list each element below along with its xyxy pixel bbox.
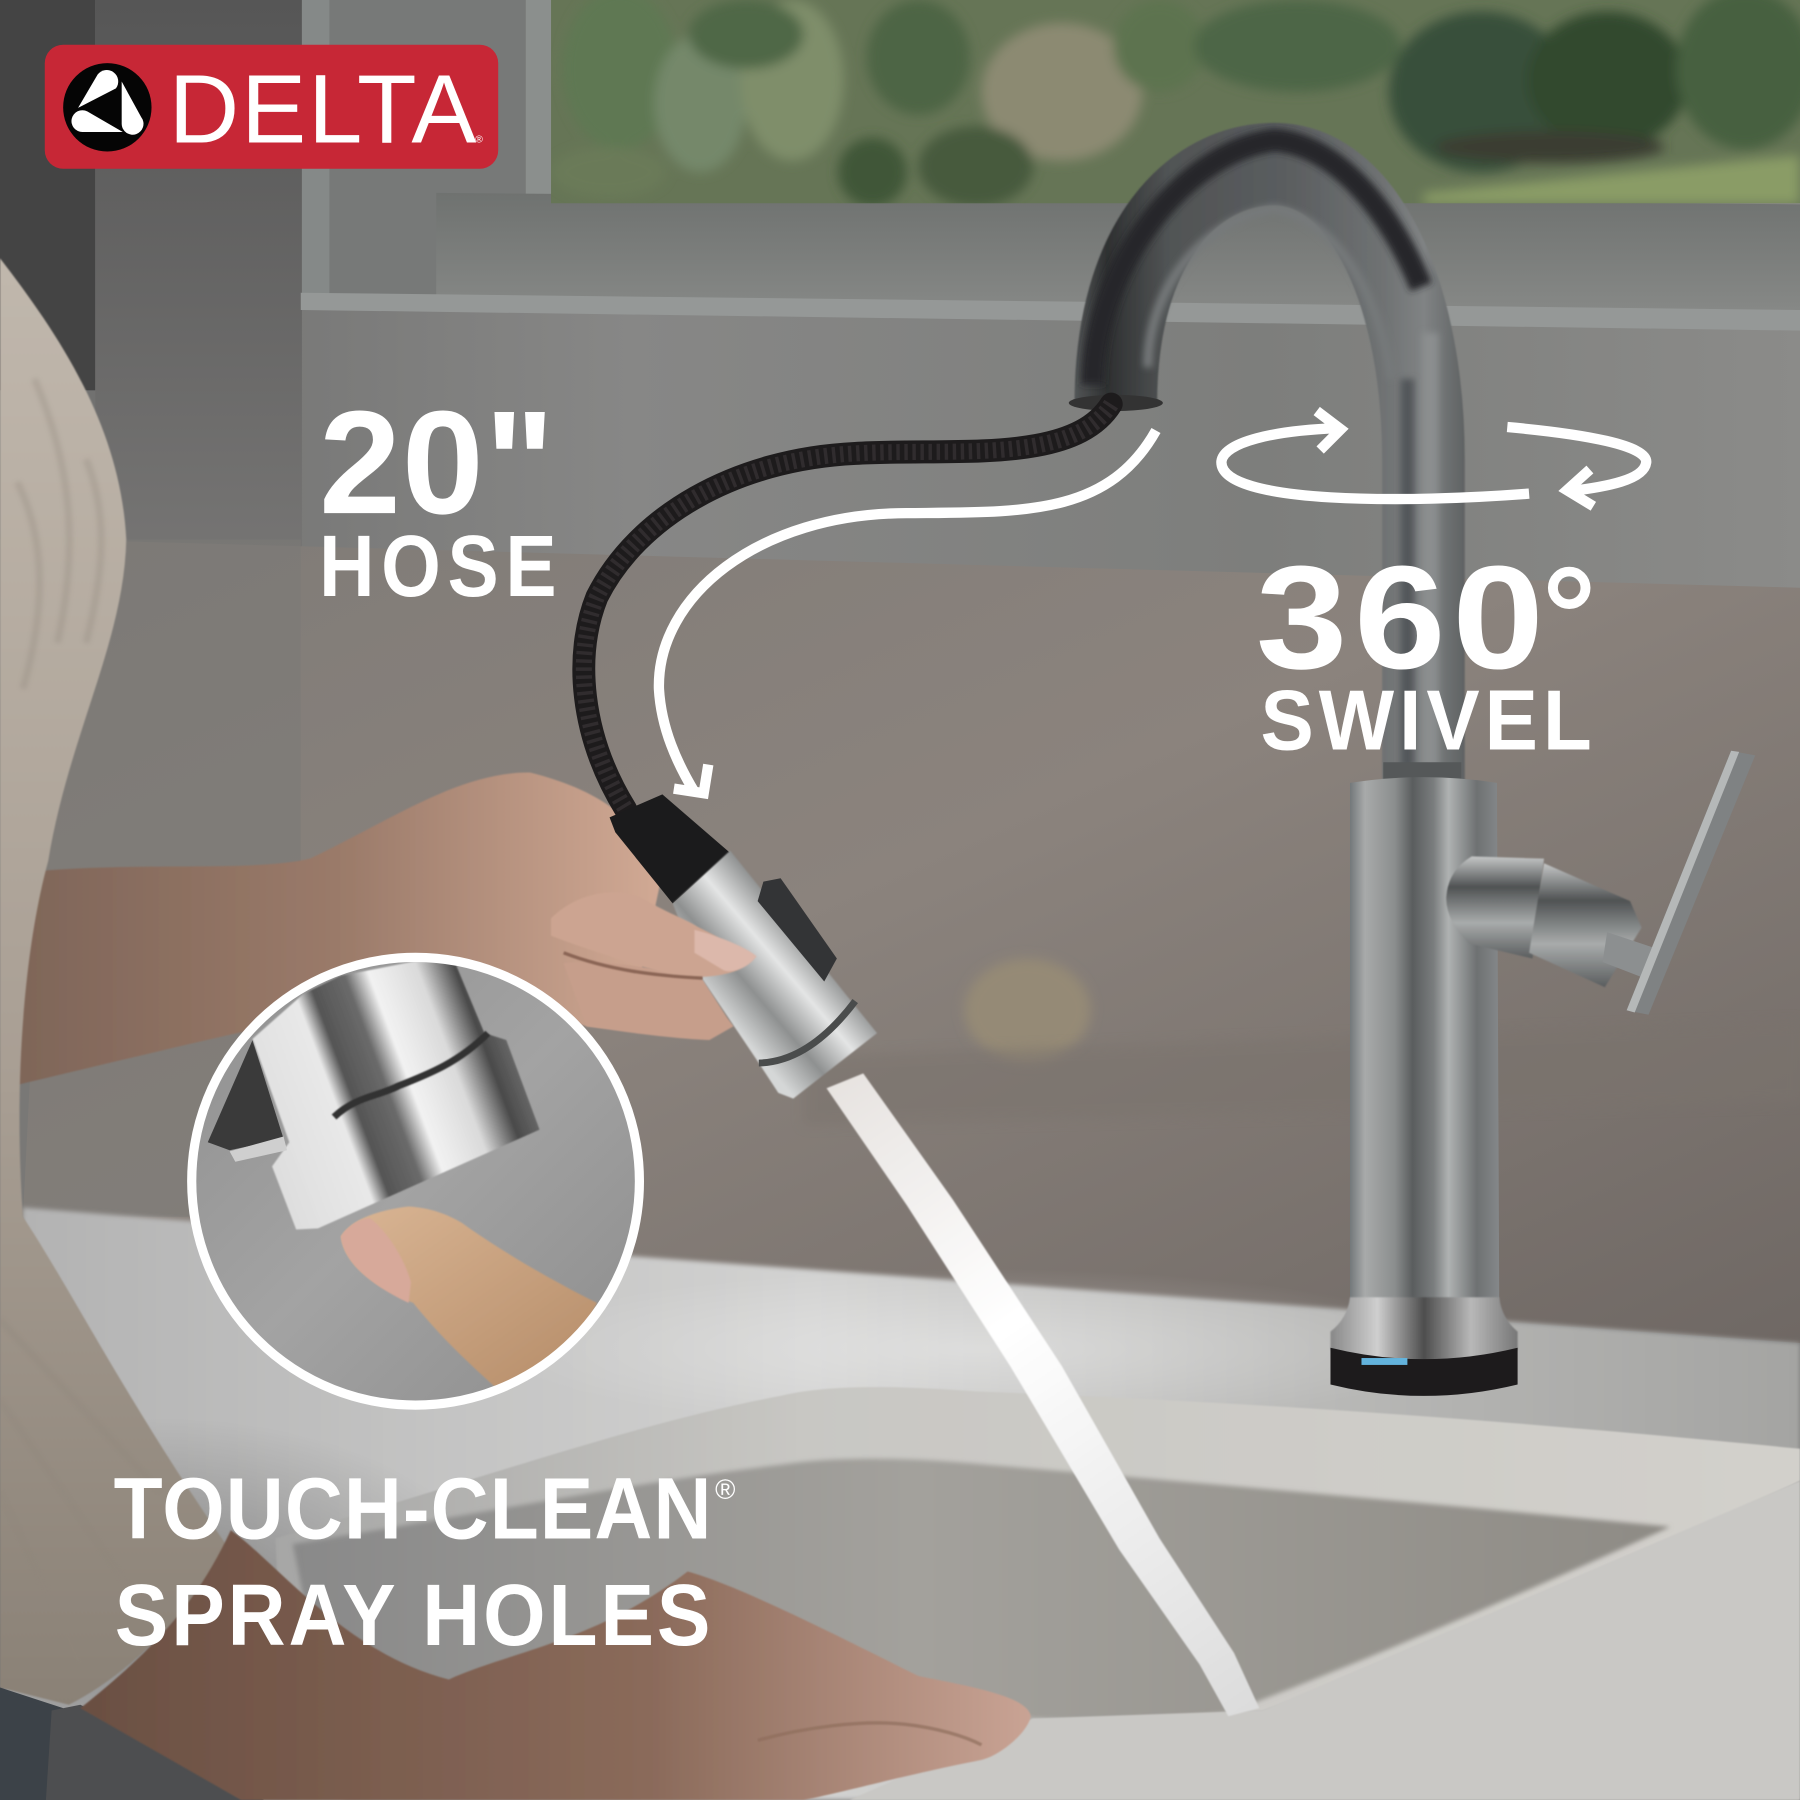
hose label (319, 381, 557, 615)
black collar (610, 794, 730, 903)
lower finger (564, 962, 734, 1040)
hose label: 20" (319, 381, 554, 545)
faucet body (1350, 777, 1499, 1303)
touch-clean label: ® (715, 1474, 735, 1505)
index finger over spray head (551, 892, 757, 978)
window sill (436, 193, 1800, 310)
sweater (0, 258, 230, 1705)
metal wand (673, 851, 877, 1099)
fingernail (695, 930, 757, 971)
sprayer button (758, 878, 837, 982)
upper arm and hand (17, 773, 660, 1085)
gooseneck spout (1069, 140, 1430, 781)
faucet (1069, 140, 1755, 1396)
swivel label: 360 (1256, 536, 1544, 700)
Delta logo badge: ® (475, 134, 483, 145)
touch-clean label: SPRAY HOLES (115, 1566, 710, 1664)
inset detail circle (192, 957, 639, 1405)
handle (1446, 751, 1755, 1015)
black sprayer button (208, 1040, 284, 1150)
sprayer metal (253, 959, 540, 1229)
swivel label: ° (1541, 539, 1598, 699)
window view with trees (551, 0, 1800, 207)
clip band (759, 1001, 855, 1063)
countertop (0, 1208, 1800, 1800)
lower hand (80, 1530, 1031, 1800)
swivel label (1256, 536, 1598, 768)
touch-clean label (114, 1459, 735, 1664)
jeans (0, 1688, 63, 1800)
Delta logo badge (45, 45, 498, 169)
flared base (1330, 1297, 1518, 1361)
black touch base (1330, 1348, 1518, 1396)
wordmark: DELTA (169, 54, 476, 163)
hose length arrow (659, 430, 1156, 793)
blue LED (1361, 1358, 1407, 1365)
sink basin (276, 1387, 1800, 1800)
lever (1627, 751, 1755, 1015)
hose (584, 404, 1111, 809)
collar (1383, 762, 1461, 785)
spray head (610, 794, 877, 1099)
front counter edge (849, 1481, 1800, 1800)
swivel arrow (1221, 411, 1646, 506)
water stream (827, 1073, 1259, 1716)
stone backsplash (23, 540, 1800, 1343)
finger crease (564, 953, 703, 978)
hose label: HOSE (319, 518, 557, 615)
swivel label: SWIVEL (1260, 673, 1592, 768)
fingernail (341, 1218, 411, 1303)
upper wall (0, 0, 1800, 597)
logo mark (63, 63, 152, 152)
touch-clean label: TOUCH-CLEAN (114, 1459, 711, 1557)
finger (341, 1207, 597, 1387)
sweater sleeve and arm (0, 258, 734, 1800)
